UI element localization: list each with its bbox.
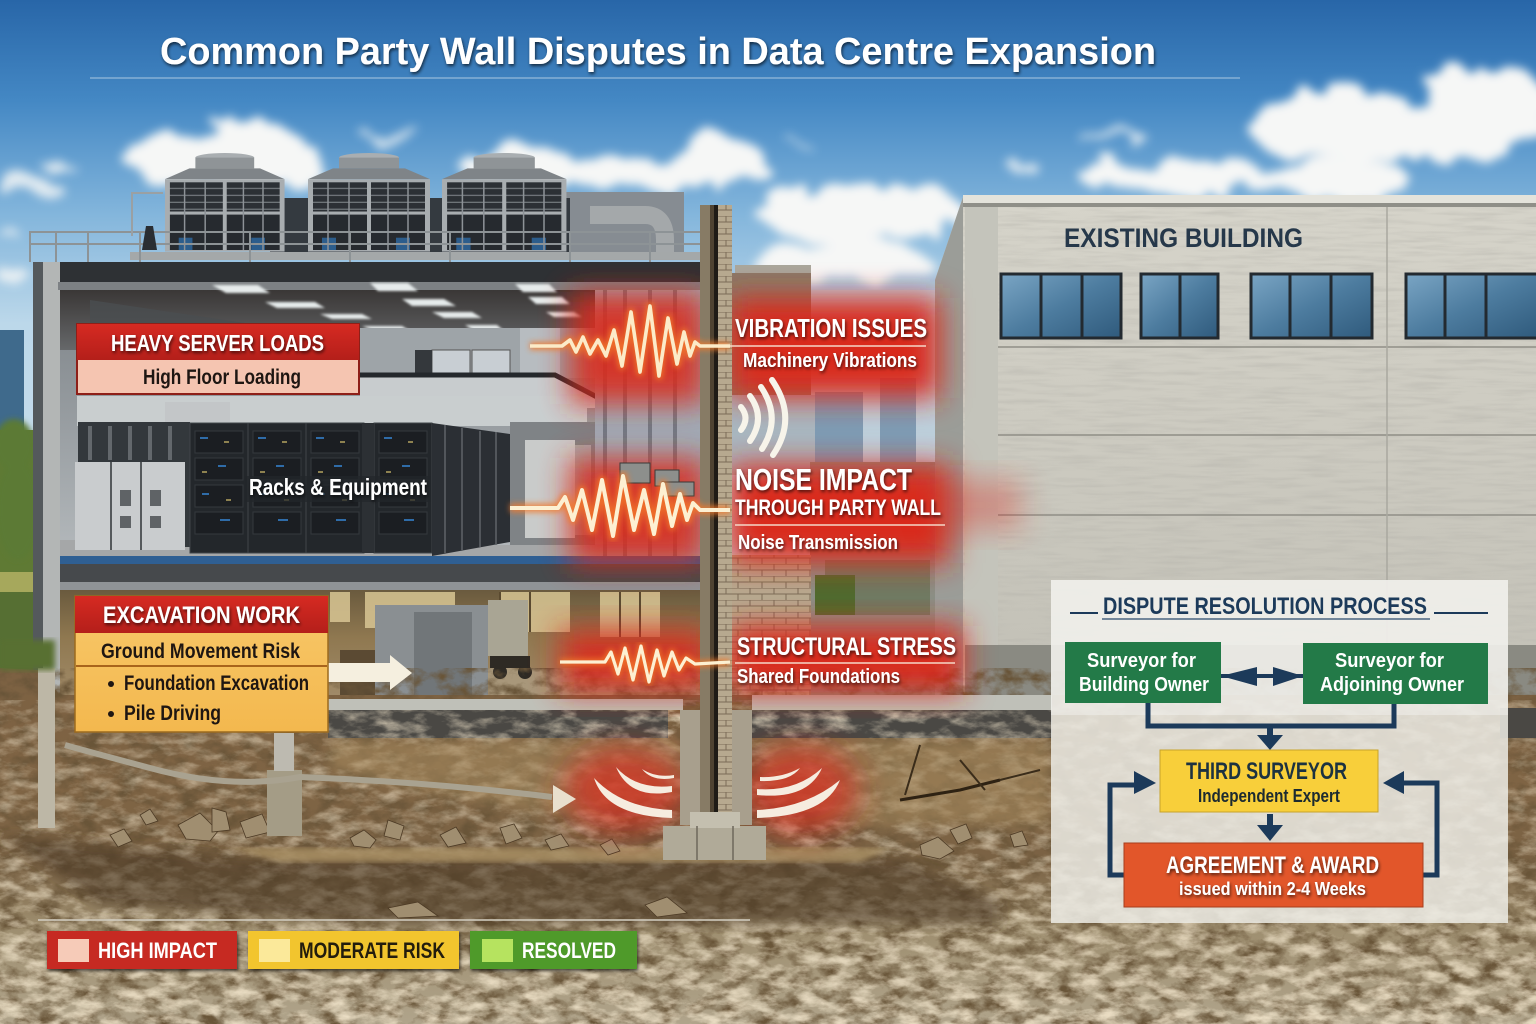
step: surveyor for adjoining owner: Surveyor for [1335, 650, 1444, 672]
step: third surveyor: Independent Expert [1198, 786, 1340, 806]
callout: structural stress: STRUCTURAL STRESS [737, 633, 956, 661]
callout: heavy server loads: High Floor Loading [143, 366, 301, 389]
lower floor plant machine [340, 600, 532, 695]
callout: heavy server loads: HEAVY SERVER LOADS [111, 330, 324, 356]
callout: heavy server loads [77, 324, 359, 394]
structural stress wave [560, 646, 730, 682]
callout: structural stress [735, 633, 956, 688]
callout: noise impact: THROUGH PARTY WALL [735, 495, 941, 520]
legend: high impact [47, 931, 237, 969]
background: sky [0, 0, 1536, 720]
distant city and trees [0, 330, 40, 682]
legend divider [38, 919, 750, 921]
window row [1001, 274, 1536, 338]
new data centre building: structure and interior [33, 262, 702, 695]
rooftop plant: cooling units, ducts and railing [30, 153, 700, 262]
party wall with footing [663, 205, 766, 860]
icon: ground vibration arcs left [594, 767, 674, 818]
panel heading: DISPUTE RESOLUTION PROCESS [1103, 593, 1427, 620]
existing building [935, 195, 1536, 697]
ground and excavation [0, 640, 1536, 1024]
step: third surveyor [1160, 750, 1378, 812]
heading: existing building: EXISTING BUILDING [1064, 223, 1303, 253]
callout: noise impact: Noise Transmission [738, 532, 898, 554]
legend: moderate risk: MODERATE RISK [299, 938, 445, 963]
callout: excavation work: Pile Driving [124, 702, 221, 725]
connectors between steps [1110, 667, 1437, 875]
step: agreement and award: issued within 2-4 Weeks [1179, 879, 1366, 899]
legend: resolved: RESOLVED [522, 938, 616, 963]
panel: dispute resolution process [1051, 580, 1508, 923]
arrow: ground movement pipe [65, 745, 576, 813]
callout: structural stress: Shared Foundations [737, 666, 900, 688]
callout: excavation work: Foundation Excavation [124, 672, 309, 695]
callout: vibration issues [730, 313, 927, 372]
callout: excavation work: EXCAVATION WORK [103, 602, 301, 629]
arrow: excavation to machine [328, 655, 412, 690]
callout: excavation work [75, 596, 328, 732]
step: surveyor for building owner [1065, 642, 1221, 703]
step: surveyor for building owner: Building Owner [1079, 674, 1209, 696]
callout: noise impact [735, 462, 945, 554]
title: Common Party Wall Disputes in Data Centre Expansion [160, 31, 1156, 73]
step: agreement and award: AGREEMENT & AWARD [1166, 852, 1379, 879]
callout: noise impact: NOISE IMPACT [735, 462, 912, 497]
red impact glows [560, 292, 1020, 834]
vibration wave [530, 306, 730, 376]
callout: vibration issues: Machinery Vibrations [743, 350, 917, 372]
icon: sound waves [741, 380, 785, 455]
legend: moderate risk [248, 931, 459, 969]
callout: excavation work: Ground Movement Risk [101, 640, 300, 663]
step: surveyor for adjoining owner: Adjoining Owner [1320, 674, 1464, 696]
clouds [0, 65, 1536, 286]
step: third surveyor: THIRD SURVEYOR [1186, 758, 1347, 785]
legend: resolved [470, 931, 637, 969]
noise wave and equipment [510, 463, 730, 536]
server racks and equipment [75, 402, 510, 556]
step: agreement and award [1124, 843, 1423, 907]
icon: ground vibration arcs right [757, 768, 840, 818]
label: racks and equipment: Racks & Equipment [249, 474, 427, 500]
step: surveyor for building owner: Surveyor for [1087, 650, 1196, 672]
legend: high impact: HIGH IMPACT [98, 938, 217, 963]
background brick block and city beyond the wall [730, 265, 935, 695]
rubble [110, 808, 1028, 918]
callout: vibration issues: VIBRATION ISSUES [735, 313, 927, 343]
step: surveyor for adjoining owner [1303, 643, 1488, 704]
